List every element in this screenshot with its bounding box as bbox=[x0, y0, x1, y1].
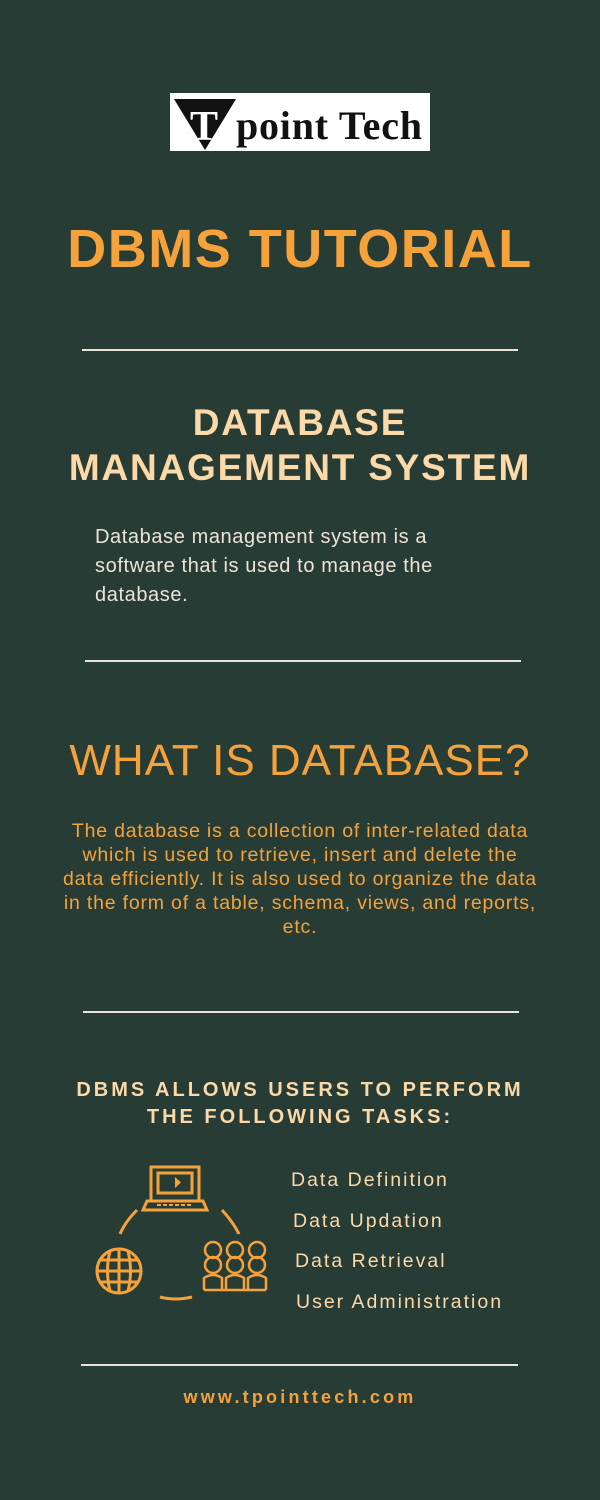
logo: T bbox=[190, 104, 218, 150]
definition text: Database management system is a software that is used to manage the database. bbox=[95, 526, 433, 606]
icon: people bbox=[204, 1242, 266, 1290]
tasks heading: THE FOLLOWING TASKS: bbox=[147, 1106, 453, 1128]
logo: point Tech bbox=[236, 103, 422, 148]
logo bbox=[170, 93, 430, 151]
subtitle: DATABASE bbox=[193, 402, 407, 443]
arcs bbox=[120, 1210, 239, 1299]
icon: laptop bbox=[143, 1167, 207, 1210]
database description bbox=[63, 820, 537, 938]
database description: data efficiently. It is also used to organize the data bbox=[63, 868, 537, 890]
task list: Data Definition bbox=[291, 1169, 449, 1191]
heading: what is database: WHAT IS DATABASE? bbox=[69, 736, 531, 785]
database description: etc. bbox=[283, 916, 317, 938]
tasks heading bbox=[76, 1079, 524, 1128]
task list: User Administration bbox=[296, 1290, 503, 1312]
website url: www.tpointtech.com bbox=[184, 1387, 416, 1407]
database description: which is used to retrieve, insert and delete the bbox=[82, 844, 518, 866]
subtitle: MANAGEMENT SYSTEM bbox=[69, 447, 531, 488]
task list bbox=[291, 1169, 503, 1312]
database description: in the form of a table, schema, views, and reports, bbox=[64, 892, 536, 914]
task list: Data Updation bbox=[293, 1210, 444, 1232]
tasks heading: DBMS ALLOWS USERS TO PERFORM bbox=[76, 1079, 524, 1101]
database description: The database is a collection of inter-related data bbox=[72, 820, 528, 842]
task list: Data Retrieval bbox=[295, 1250, 447, 1272]
title: DBMS TUTORIAL bbox=[67, 219, 533, 279]
subtitle bbox=[69, 402, 531, 488]
icon cycle bbox=[96, 1166, 268, 1300]
icon: globe bbox=[97, 1249, 141, 1293]
